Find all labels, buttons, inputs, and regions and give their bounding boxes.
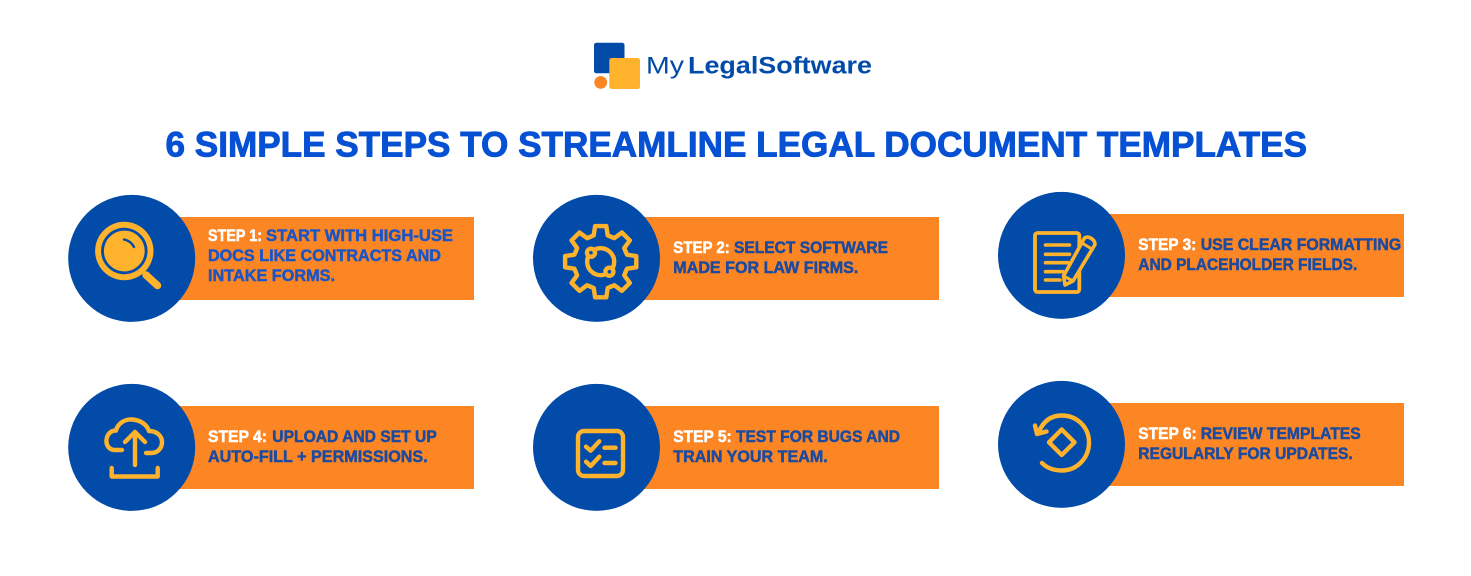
step 5 text — [673, 428, 900, 466]
step 3 text: USE CLEAR FORMATTING — [1201, 236, 1401, 254]
icon: document and pencil — [1035, 233, 1095, 292]
step 4 text: STEP 4: — [208, 428, 267, 446]
step 2 bar — [635, 217, 939, 300]
step 5 text: STEP 5: — [673, 428, 732, 446]
step 3 text — [1138, 236, 1401, 274]
icon: gear — [565, 226, 636, 297]
step 2 text: STEP 2: — [673, 239, 730, 257]
logo — [594, 43, 872, 89]
step 3 circle — [998, 192, 1125, 319]
step 6 text: REVIEW TEMPLATES — [1201, 425, 1361, 443]
title: 6 SIMPLE STEPS TO STREAMLINE LEGAL DOCUMENT TEMPLATES — [166, 126, 1307, 164]
step 5 bar — [635, 406, 939, 489]
step 1 circle — [68, 195, 195, 322]
step 6 text — [1138, 425, 1361, 463]
step 3 text: STEP 3: — [1138, 236, 1196, 254]
icon: review cycle — [1035, 416, 1089, 470]
step 5 circle — [533, 384, 660, 511]
step 4 text: UPLOAD AND SET UP — [272, 428, 437, 446]
step 2 text — [673, 239, 888, 277]
panel: step 1 — [68, 195, 474, 322]
step 4 circle — [68, 384, 195, 511]
panel: step 5 — [533, 384, 939, 511]
panel: step 2 — [533, 195, 939, 322]
step 5 text: TEST FOR BUGS AND — [736, 428, 900, 446]
step 3 bar — [1100, 214, 1404, 297]
step 1 text: START WITH HIGH-USE — [266, 227, 453, 245]
step 1 text: STEP 1: — [208, 227, 262, 245]
panel: step 4 — [68, 384, 474, 511]
step 2 text: SELECT SOFTWARE — [734, 239, 888, 257]
logo mark — [594, 43, 640, 89]
icon: magnifying glass — [95, 222, 158, 286]
step 6 text: STEP 6: — [1138, 425, 1197, 443]
step 1 bar — [170, 217, 474, 300]
step 6 bar — [1100, 403, 1404, 486]
panel: step 3 — [998, 192, 1404, 319]
logo wordmark: My — [646, 52, 685, 80]
panel: step 6 — [998, 381, 1404, 508]
step 5 text: TRAIN YOUR TEAM. — [673, 448, 828, 466]
icon: cloud upload — [106, 419, 162, 476]
step 2 circle — [533, 195, 660, 322]
icon: checklist — [578, 431, 623, 476]
step 4 text: AUTO-FILL + PERMISSIONS. — [208, 448, 428, 466]
step 6 text: REGULARLY FOR UPDATES. — [1138, 445, 1353, 463]
step 2 text: MADE FOR LAW FIRMS. — [673, 259, 858, 277]
step 4 bar — [170, 406, 474, 489]
step 1 text — [208, 227, 453, 285]
logo wordmark: LegalSoftware — [688, 52, 872, 80]
step 3 text: AND PLACEHOLDER FIELDS. — [1138, 256, 1357, 274]
step 6 circle — [998, 381, 1125, 508]
step 1 text: INTAKE FORMS. — [208, 267, 335, 285]
step 1 text: DOCS LIKE CONTRACTS AND — [208, 247, 441, 265]
step 4 text — [208, 428, 437, 466]
